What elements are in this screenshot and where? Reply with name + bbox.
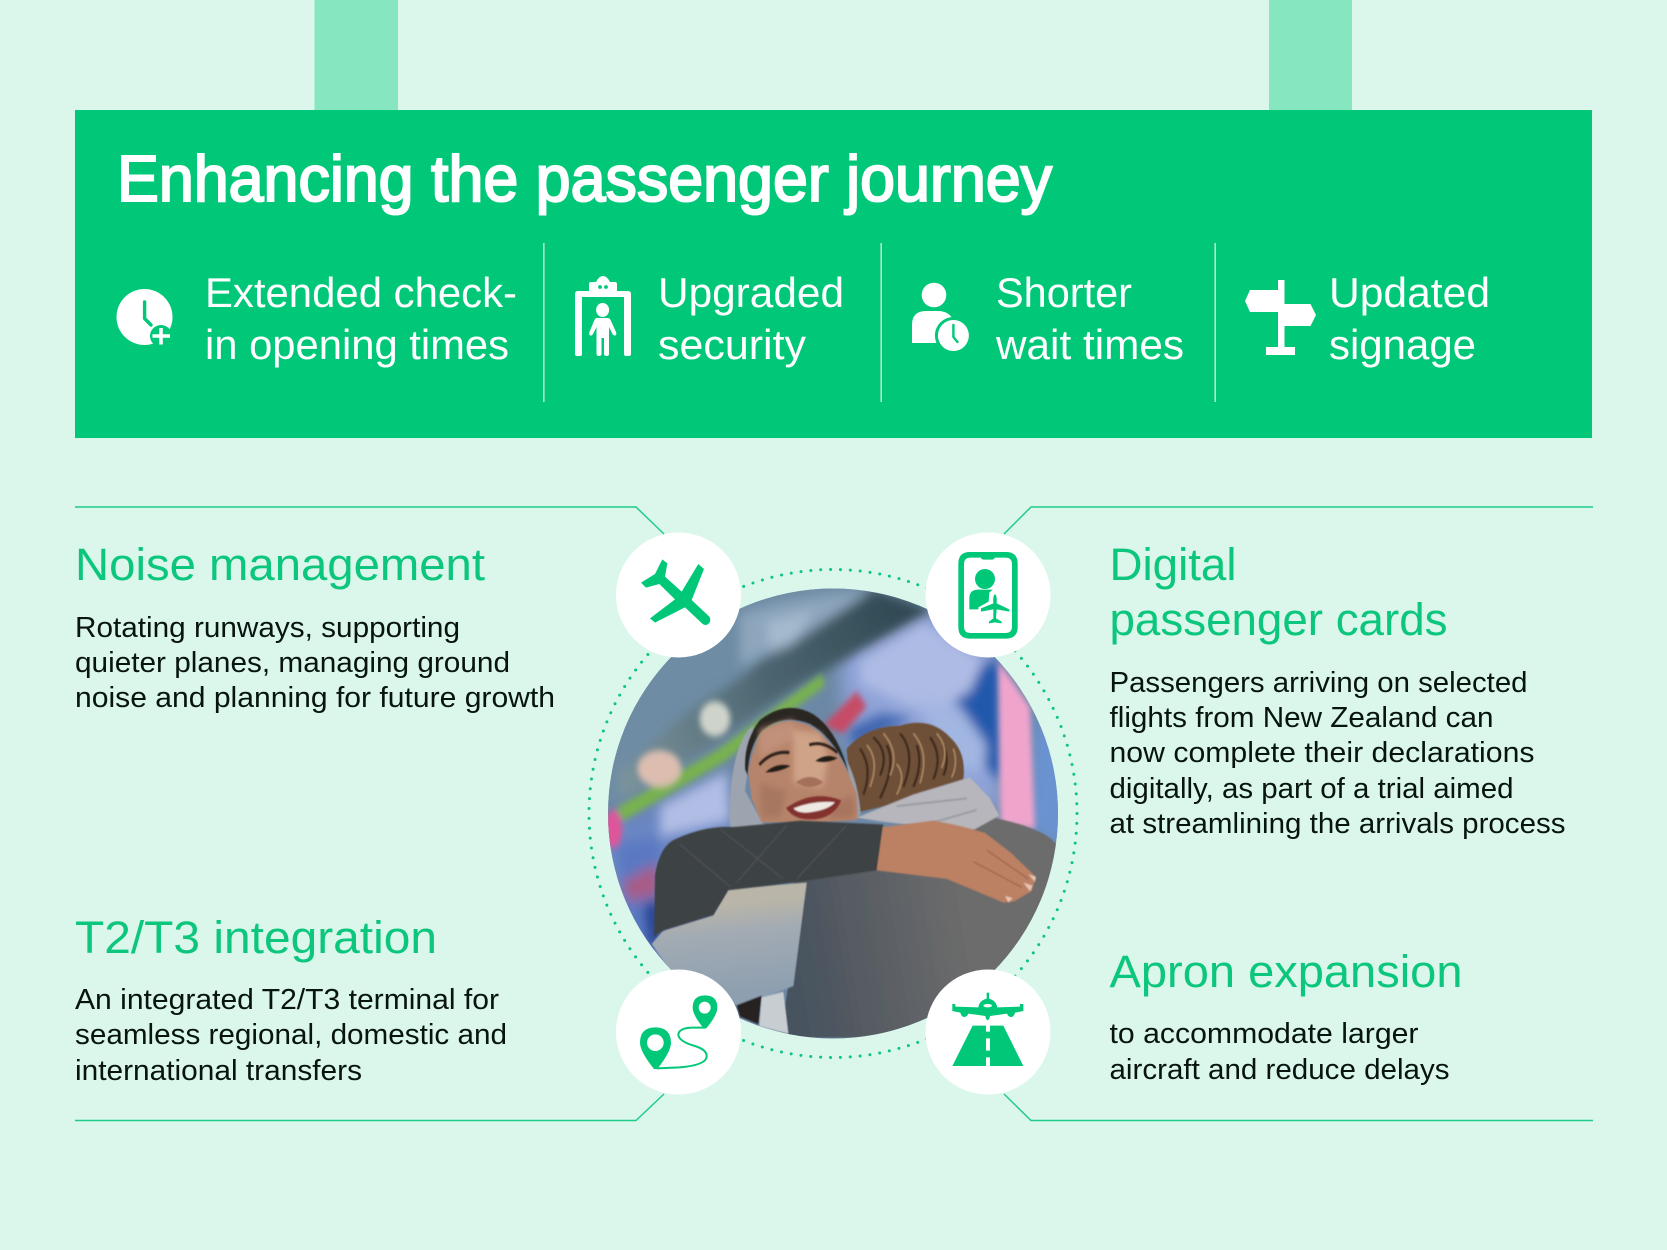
icon: phone with passenger and plane [958, 552, 1018, 639]
panel: noise management [75, 539, 555, 714]
panel: apron expansion: Apron expansion [1110, 946, 1462, 997]
title: Enhancing the passenger journey [117, 142, 1052, 215]
text: updated signage: Updated [1329, 269, 1490, 316]
photo: embracing travellers at the airport [608, 588, 1058, 1038]
text: shorter wait times: Shorter [996, 269, 1132, 316]
panel: T2/T3 integration: An integrated T2/T3 terminal for [75, 984, 499, 1016]
hijab [730, 726, 767, 829]
icon: route with pins [640, 995, 717, 1069]
brows and eyes [759, 752, 789, 765]
panel: digital passenger cards [1110, 539, 1566, 840]
icon badge: apron [926, 970, 1050, 1094]
panel: digital passenger cards: Digital [1110, 539, 1236, 590]
text: upgraded security: security [658, 321, 806, 368]
hand [877, 821, 1036, 903]
text: extended check-in: Extended check- [205, 269, 517, 316]
icon badge: digital card [926, 532, 1050, 658]
sleeve [654, 821, 883, 936]
panel: noise management: quieter planes, managing ground [75, 647, 510, 679]
text: extended check-in: in opening times [205, 321, 509, 368]
woman's back [652, 883, 807, 1005]
face [748, 721, 857, 823]
panel: T2/T3 integration: international transfers [75, 1055, 362, 1087]
panel: T2/T3 integration: seamless regional, domestic and [75, 1019, 507, 1051]
panel: passenger journey header [75, 110, 1592, 438]
man's sweater [780, 818, 1056, 1038]
icon: plane over runway [952, 993, 1023, 1066]
panel: digital passenger cards: at streamlining the arrivals process [1110, 808, 1566, 840]
icon badge: plane [616, 532, 741, 658]
smile [786, 796, 841, 820]
text: updated signage: signage [1329, 321, 1476, 368]
panel: apron expansion: to accommodate larger [1110, 1018, 1419, 1050]
hanging tab right [1269, 0, 1352, 110]
panel: noise management: Noise management [75, 539, 486, 590]
text: shorter wait times [995, 269, 1184, 368]
panel: digital passenger cards: Passengers arriving on selected [1110, 667, 1528, 699]
text: shorter wait times: wait times [995, 321, 1184, 368]
text: upgraded security: Upgraded [658, 269, 844, 316]
panel: apron expansion: aircraft and reduce delays [1110, 1054, 1450, 1086]
panel: apron expansion [1110, 946, 1462, 1086]
panel: noise management: noise and planning for future growth [75, 682, 555, 714]
icon: person with clock [912, 283, 972, 354]
panel: digital passenger cards: now complete their declarations [1110, 737, 1534, 769]
text: updated signage [1329, 269, 1490, 368]
panel: digital passenger cards: digitally, as part of a trial aimed [1110, 773, 1514, 805]
icon badge: route [616, 970, 741, 1094]
hanging tab left [314, 0, 398, 110]
text: extended check-in [205, 269, 517, 368]
icon: clock plus [116, 289, 172, 347]
connector lines: bottom left [75, 1094, 664, 1120]
panel: T2/T3 integration [75, 912, 507, 1087]
dotted ring [589, 570, 1077, 1058]
text: upgraded security [658, 269, 844, 368]
icon: plane [641, 559, 710, 625]
hair [745, 708, 848, 776]
icon: security scanner [575, 276, 631, 356]
panel: noise management: Rotating runways, supporting [75, 612, 460, 644]
hood [857, 777, 999, 831]
connector lines: bottom right [1004, 1094, 1593, 1120]
man's hair [847, 723, 964, 812]
panel: digital passenger cards: passenger cards [1110, 594, 1448, 645]
connector lines: top right [1004, 507, 1593, 534]
panel: digital passenger cards: flights from New Zealand can [1110, 702, 1494, 734]
connector lines: top left [75, 507, 664, 534]
panel: T2/T3 integration: T2/T3 integration [75, 912, 437, 963]
icon: signpost [1245, 280, 1316, 355]
